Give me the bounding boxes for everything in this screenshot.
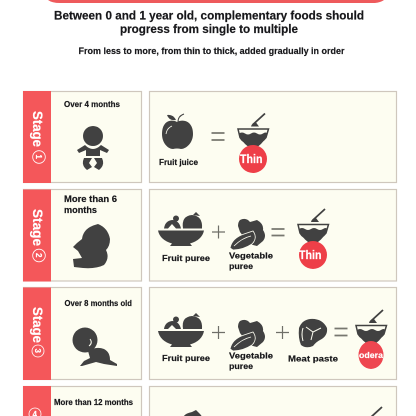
icon: crawling baby (72, 328, 117, 366)
icon: vegetables (230, 320, 265, 351)
label: vegetable puree (229, 350, 273, 371)
plus sign (276, 326, 289, 339)
icon: spoon (370, 407, 382, 416)
icon: fruit bowl (158, 212, 204, 246)
consistency badge: thin (239, 145, 267, 173)
title: Between 0 and 1 year old, complementary foods should (54, 10, 364, 22)
stage 2 label: 2 (34, 253, 43, 258)
consistency badge: thin (299, 241, 327, 269)
panel: stage 1 foods (150, 92, 396, 182)
title: progress from single to multiple (120, 24, 298, 36)
panel: stage 2 age (23, 190, 142, 282)
icon: fruit bowl (158, 313, 204, 347)
age text (64, 194, 117, 215)
stage 1 label (23, 91, 51, 183)
equals sign (334, 328, 348, 336)
consistency badge: moderate: odera (359, 350, 383, 360)
stage 1 label: Stage (30, 111, 45, 147)
equals sign (212, 133, 224, 140)
label: vegetable puree: puree (229, 261, 253, 271)
age text: Over 8 months old (64, 298, 132, 308)
consistency badge: moderate (358, 341, 384, 369)
age text: Over 4 months (64, 99, 120, 109)
icon: bowl (298, 209, 328, 242)
panel: stage 3 foods (150, 288, 396, 380)
icon: newborn baby (77, 126, 109, 170)
stage 3 label: 3 (33, 348, 42, 354)
label: vegetable puree: Vegetable (229, 350, 273, 360)
icon: sitting baby (73, 224, 110, 268)
panel: stage 2 foods (150, 190, 396, 281)
age text: months (64, 205, 97, 215)
label: meat paste: Meat paste (288, 354, 338, 364)
consistency badge: thin: Thin (299, 248, 322, 262)
icon: bowl (238, 114, 268, 146)
panel: stage 1 age (23, 91, 142, 183)
label: vegetable puree (229, 250, 273, 271)
icon: bowl (356, 310, 386, 343)
label: vegetable puree: Vegetable (229, 250, 273, 260)
label: fruit puree: Fruit puree (162, 253, 210, 263)
panel: stage 4 foods (150, 386, 396, 416)
stage 2 label: Stage (30, 209, 45, 246)
panel: stage 4 age (23, 386, 142, 416)
label: vegetable puree: puree (229, 361, 253, 371)
age text: More than 6 (64, 194, 117, 204)
icon: vegetables (230, 219, 265, 250)
label: fruit puree: Fruit puree (162, 353, 210, 363)
age text: More than 12 months (54, 397, 133, 407)
top banner (48, 0, 384, 3)
icon: apple (162, 114, 193, 149)
plus sign (212, 226, 225, 238)
title (54, 10, 364, 36)
label: fruit juice: Fruit juice (159, 158, 199, 167)
subtitle: From less to more, from thin to thick, added gradually in order (78, 46, 345, 56)
equals sign (272, 229, 284, 236)
panel: stage 3 age (23, 288, 142, 380)
icon: meat (299, 319, 327, 347)
stage 3 label (23, 288, 51, 380)
consistency badge: thin: Thin (240, 152, 262, 166)
stage 2 label (23, 190, 51, 282)
stage 3 label: Stage (30, 307, 45, 343)
icon: fruit top (183, 410, 202, 416)
stage 1 label: 1 (34, 154, 43, 160)
plus sign (212, 326, 225, 339)
